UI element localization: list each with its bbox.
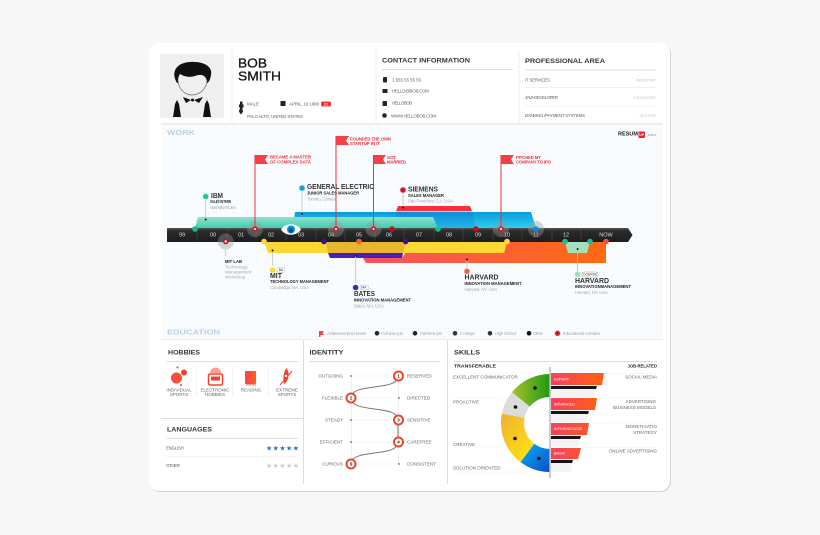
timeline axis: 06 [386,232,392,238]
transferable labels: EXCELLENT COMMUNICATOR [453,374,519,380]
name: BOB [238,56,267,70]
languages panel: OTHER [166,463,181,468]
languages panel: ★★★★★ [266,462,299,470]
education: mit lab: MIT LAB [225,259,242,264]
contact information: 1 555 55 55 55 [392,78,421,82]
contact information [382,58,513,118]
hobbies panel: READING [241,388,262,392]
professional area: IT SERVICES [525,78,550,82]
transferable labels: CREATIVE [453,442,475,447]
logo: UP [639,133,645,137]
identity panel: OUTGOING [318,374,343,378]
languages panel: LANGUAGES [167,426,213,434]
hobbies panel: ELECTRONIC [200,388,230,392]
job-related labels: ONLINE ADVERTISING [609,448,657,454]
job: ibm: New York, NY, USA [210,205,236,210]
funnel levels: INTERMEDIATE [554,427,582,431]
professional area: BANKING /PAYMENT SYSTEMS [525,113,585,118]
identity panel: STEADY [325,418,343,422]
flag: got married: MARRIED [387,160,406,164]
name [238,56,281,84]
education: mit lab [218,234,252,280]
languages panel: ENGLISH [166,446,184,450]
contact information: WWW.HELLOBOB.COM [391,114,436,118]
timeline markers [192,221,609,244]
job: siemens: SALES MANAGER [408,193,444,198]
education: harvard innovation: INNOVATION MANAGEMENT [464,281,522,286]
timeline axis: 01 [238,232,244,238]
professional area: JAVA DEVELOPER [525,95,559,100]
identity panel: SENSITIVE [407,418,431,422]
timeline axis: 00 [210,232,216,238]
identity panel: 2 [350,396,353,400]
hobbies panel: SPORTS [278,392,296,397]
education: bates: BATES [354,291,375,298]
section dividers [161,340,448,484]
flag: got married: GOT [387,155,396,160]
professional area: SECTOR [639,113,656,118]
languages panel: ★★★★★ [266,444,299,452]
timeline axis [167,228,632,242]
hobbies panel [166,350,298,397]
flag: pitched my company to ipo: PITCHED MY [516,155,541,160]
education: harvard innovation: Harvard, NY, USA [464,287,498,292]
timeline axis: 05 [356,232,362,238]
contact information: HELLO@BOB.COM [392,88,429,94]
job: siemens: SIEMENS [408,186,438,194]
funnel levels: EXPERT [554,378,570,382]
education: harvard course: COURSE [583,272,598,276]
job: ibm: IBM [211,193,223,200]
funnel levels: ADVANCED [554,402,575,406]
job: ibm: SALES INTERN [210,199,231,204]
flag: got married [366,155,406,237]
personal details: APRIL, 18 1988 [289,102,319,106]
identity panel: DIRECTED [407,396,431,400]
icon: extreme sports [280,368,292,385]
education: harvard course: Harvard, NY, USA [575,290,608,295]
professional area [525,58,656,118]
identity panel: CAREFREE [407,440,432,444]
education heading: EDUCATION [167,328,220,336]
education: mit lab: Technology [225,264,249,270]
job: general electric: JUNIOR SALES MANAGER [307,190,359,196]
languages panel [166,426,299,470]
skills panel: TRANSFERABLE [454,363,496,368]
job: general electric: GENERAL ELECTRIC [307,184,374,191]
personal details: PALO ALTO, UNITED STATES [247,114,303,119]
education: mit: MIT [270,273,283,280]
education: bates [353,255,411,308]
legend [319,330,601,337]
identity panel: IDENTITY [310,350,344,356]
legend: High School [495,331,516,336]
professional area: PROFESSIONAL AREA [525,58,605,65]
donut chart [501,374,550,472]
legend: Part-time job [420,331,442,336]
job-related labels [581,374,657,454]
flag: became a master of complex data: BECAME A MASTER [270,154,312,160]
hobbies panel: SPORTS [170,392,188,397]
flag: founded the own startup [328,136,391,237]
transferable labels: PROACTIVE [453,400,479,404]
logo: RESUM [618,132,638,138]
transferable labels [453,373,530,472]
identity panel: EFFICIENT [320,440,343,444]
panel divider [161,124,663,340]
transferable labels: SOLUTION ORIENTED [453,466,501,470]
résumé card [149,43,671,492]
identity panel: 1 [397,374,400,378]
timeline axis: 11 [533,232,539,238]
timeline axis: 99 [179,232,185,238]
personal details: 23 [324,102,329,106]
hobbies panel: EXTREME [276,388,298,392]
personal details: MALE [247,102,259,106]
legend: Educational Activities [563,331,601,336]
icon: reading [245,371,256,386]
job: ibm [203,193,236,220]
skills panel: JOB-RELATED [628,363,657,368]
identity panel: CURIOUS [322,462,343,466]
education bars [264,242,606,263]
current position marker [281,224,301,235]
identity panel: RESERVED [407,374,432,378]
hobbies panel: HOBBIES [168,350,201,356]
identity panel: 4 [397,440,400,444]
logo: .com [647,132,656,137]
legend: College [460,331,475,336]
job: general electric: Toronto, Canada [307,196,337,202]
job: general electric [299,184,374,215]
name: SMITH [238,68,281,84]
hobbies panel: HOBBIES [205,392,225,397]
job-related labels: ADVERTISING [626,399,656,404]
identity panel [309,350,440,468]
timeline axis: 07 [416,232,422,238]
education: mit [270,250,329,290]
work heading: WORK [167,128,196,137]
flag: became a master of complex data: OF COMPLEX DATA [270,160,311,164]
flag: founded the own startup: STARTUP IN IT [350,141,380,146]
flag: pitched my company to ipo [493,155,552,237]
hobbies panel: INDIVIDUAL [166,388,192,392]
timeline axis: NOW [599,232,614,238]
education: mit: BA [279,268,284,272]
funnel levels [551,373,604,472]
logo [618,132,656,138]
personal details [239,101,331,119]
education: bates: MA [362,286,367,290]
job-related labels: STRATEGY [633,430,657,435]
identity panel: FLEXIBLE [322,396,343,400]
legend: Achievements & Honors [327,331,367,336]
education: harvard innovation: HARVARD [464,274,498,282]
job: siemens: San Francisco, CA, USA [408,198,453,204]
legend: Full-time job [381,331,403,336]
education: harvard course: HARVARD [575,278,609,285]
job-related labels: MONETIGATIO [626,424,657,429]
education: mit lab: Workshop [225,274,246,280]
contact information: HELLOBOB [392,100,412,106]
flag: became a master of complex data [247,154,312,237]
professional area: INDUSTRY [636,78,656,82]
job-related labels: SOCIAL MEDIA [625,374,657,380]
job: siemens [400,186,453,208]
profile photo [160,54,224,118]
timeline axis: 03 [298,232,304,238]
skills panel [453,350,657,478]
timeline panel background [161,124,663,339]
contact information: CONTACT INFORMATION [382,58,470,64]
flag: founded the own startup: FOUNDED THE OWN [350,136,391,142]
legend: Other [533,331,544,336]
funnel levels: BASIC [554,452,566,456]
separators [232,50,519,123]
skills panel: SKILLS [454,350,481,356]
job-related labels: BUSINESS MODELS [613,405,656,410]
timeline axis: 09 [475,232,481,238]
education: mit: Cambridge, MA, USA [270,285,309,290]
timeline axis: 04 [328,232,334,238]
professional area: CATEGORY [634,95,656,100]
education: bates: Bates, MA, USA [354,304,384,308]
timeline axis: 08 [446,232,452,238]
education: mit lab: Management [225,270,252,274]
flag: pitched my company to ipo: COMPANY TO IPO [516,160,552,164]
education: harvard innovation [464,258,522,292]
identity panel: 3 [397,418,400,422]
work bars [195,206,536,228]
education: bates: INNOVATION MANAGEMENT [354,298,411,302]
identity panel: CONSISTENT [407,462,436,466]
education: harvard course: INNOVATIONMANAGEMENT [575,284,631,289]
icon: individual sports [171,366,187,386]
icon: electronic hobbies [208,368,222,385]
timeline axis: 10 [504,232,510,238]
education: mit: TECHNOLOGY MANAGEMENT [270,279,329,284]
timeline axis: 02 [268,232,274,238]
timeline axis: 12 [563,232,569,238]
identity panel: 5 [350,462,353,466]
education: harvard course [575,248,631,295]
